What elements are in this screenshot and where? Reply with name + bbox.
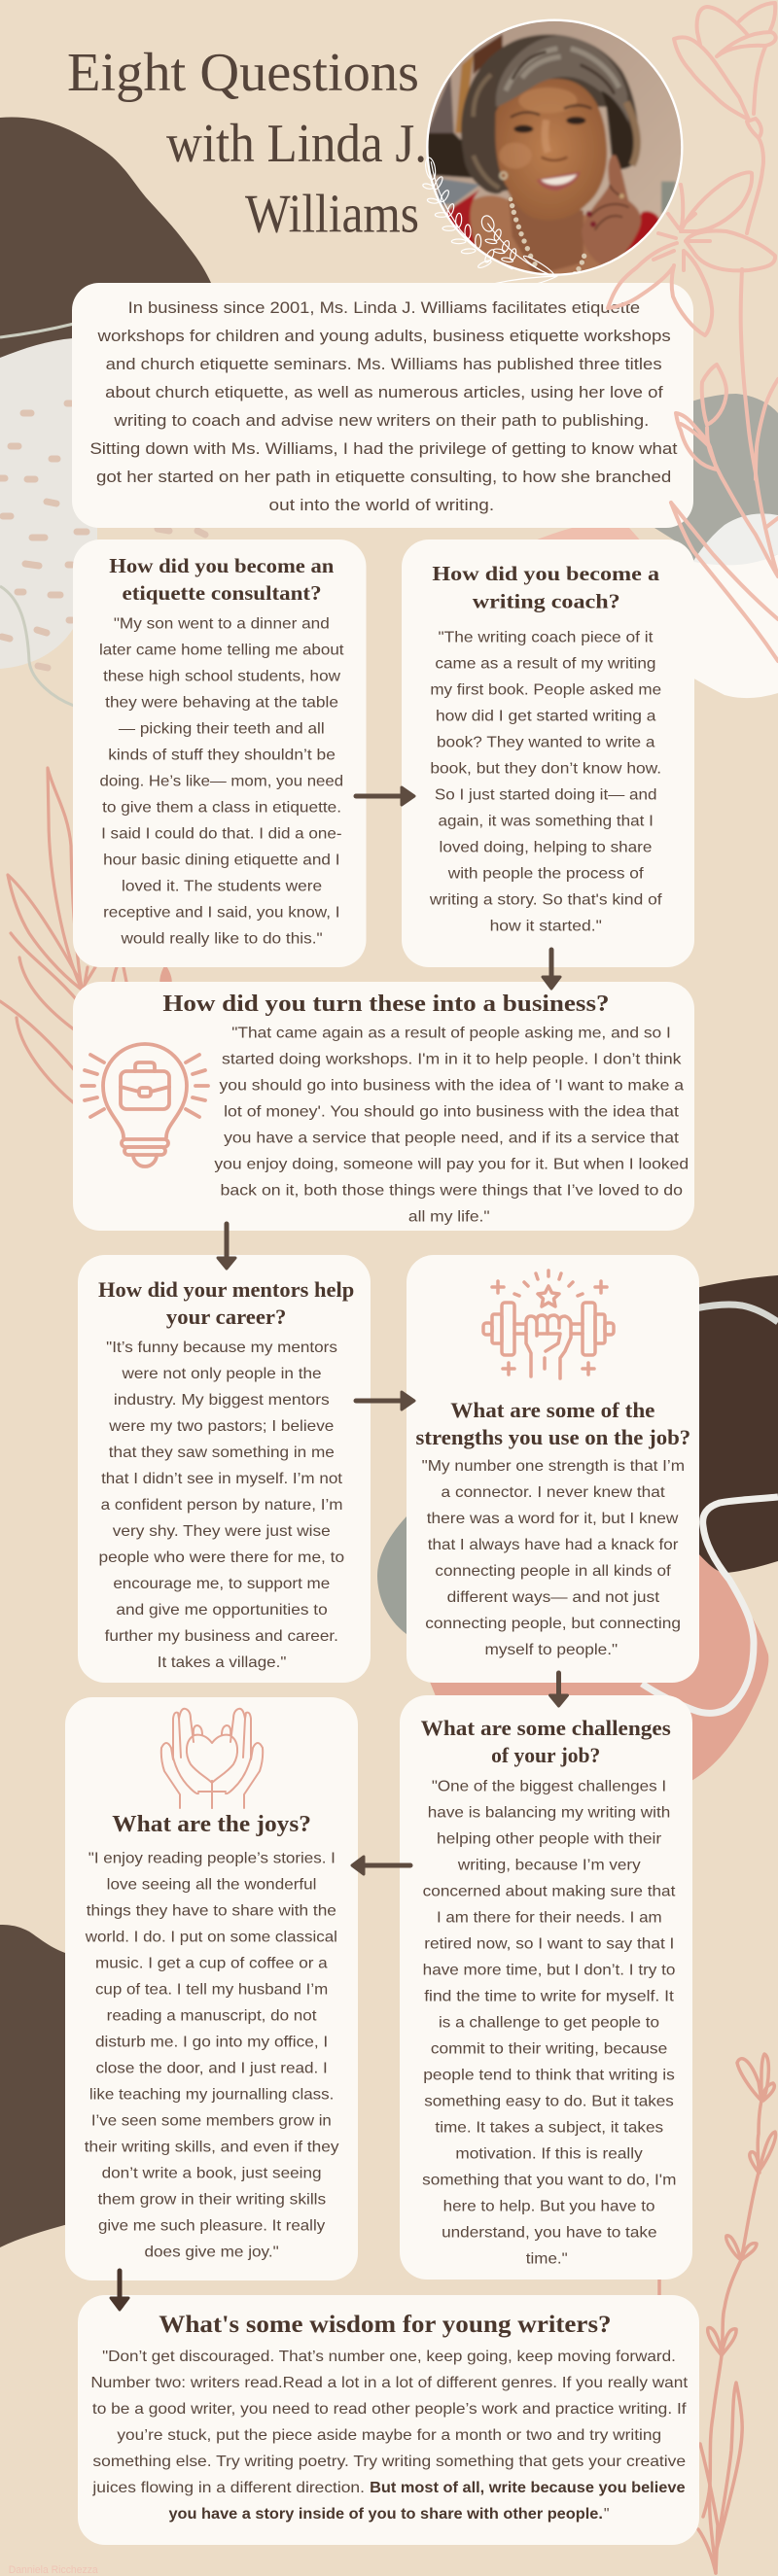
- text: mentors answer: people who were there for me, to: [99, 1549, 344, 1566]
- text: business answer: "That came again as a result of people asking me, and so I: [231, 1025, 671, 1041]
- text: strengths answer: connecting people, but connecting: [425, 1615, 681, 1632]
- portrait photo illustration: [425, 17, 688, 282]
- text: joys answer: "I enjoy reading people’s stories. I: [88, 1850, 336, 1866]
- text: writing coach answer: writing a story. So that's kind of: [428, 891, 662, 908]
- text: business answer: you should go into business with the idea of 'I want to make a: [220, 1077, 684, 1094]
- text: introduction paragraph: and church etiquette seminars. Ms. Williams has published three titles: [106, 355, 662, 373]
- panel: What are the joys?: [65, 1697, 358, 2280]
- text: challenges answer: something easy to do. But it takes: [424, 2093, 674, 2109]
- text: strengths answer: connecting people in all kinds of: [435, 1562, 672, 1580]
- text: mentors answer: encourage me, to support me: [113, 1575, 330, 1592]
- text: consultant answer: these high school students, how: [103, 667, 340, 684]
- text: challenges answer: "One of the biggest challenges I: [432, 1778, 666, 1794]
- text: challenges answer: have is balancing my writing with: [428, 1804, 670, 1821]
- text: challenges answer: helping other people with their: [437, 1830, 661, 1847]
- panel: introduction: [72, 283, 693, 528]
- text: writing coach answer: with people the process of: [446, 865, 645, 882]
- text: consultant answer: I said I could do that. I did a one-: [101, 824, 342, 842]
- text: consultant answer: receptive and I said, you know, I: [103, 903, 339, 921]
- text: challenges answer: here to help. But you have to: [443, 2198, 655, 2214]
- text: challenges answer: people tend to think that writing is: [423, 2067, 675, 2083]
- credit: author name: Danniela Ricchezza: [9, 2564, 99, 2576]
- text: wisdom answer: you’re stuck, put the piece aside maybe for a month or two and try writing: [117, 2426, 661, 2444]
- text: wisdom answer: "Don’t get discouraged. That’s number one, keep going, keep moving forward.: [102, 2348, 676, 2365]
- heading: etiquette consultant: etiquette consultant?: [123, 581, 322, 605]
- panel: What's some wisdom for young writers?: [78, 2295, 699, 2545]
- text: writing coach answer: [428, 629, 662, 934]
- text: writing coach answer: again, it was something that I: [439, 813, 654, 829]
- text: business answer: all my life.": [408, 1208, 490, 1225]
- text: challenges answer: retired now, so I want to say that I: [424, 1935, 674, 1952]
- text: writing coach answer: book, but they don’t know how.: [430, 760, 661, 777]
- text: challenges answer: something that you want to do, I'm: [422, 2172, 676, 2188]
- text: joys answer: give me such pleasure. It really: [98, 2217, 326, 2234]
- text: consultant answer: hour basic dining etiquette and I: [103, 851, 339, 868]
- text: challenges answer: [422, 1778, 676, 2267]
- arrow: consultant to coach: [356, 787, 414, 805]
- panel: What are some of the strengths you use on the job?: [407, 1255, 699, 1683]
- text: mentors answer: were not only people in the: [121, 1365, 322, 1382]
- text: wisdom answer: to be a good writer, you need to read other people’s work and practice writing. If: [92, 2400, 687, 2418]
- text: business answer: back on it, both those things were things that I’ve loved to do: [221, 1182, 683, 1199]
- text: mentors answer: and give me opportunities to: [116, 1601, 328, 1619]
- heading: mentors: your career?: [166, 1305, 286, 1329]
- text: challenges answer: writing, because I’m very: [457, 1857, 642, 1873]
- arrow: joys to wisdom: [111, 2271, 128, 2310]
- text: strengths answer: there was a word for it, but I knew: [427, 1510, 679, 1527]
- text: wisdom answer: Number two: writers read.Read a lot in a lot of different genres. If you really want: [90, 2374, 689, 2391]
- text: strengths answer: different ways— and not just: [447, 1588, 660, 1606]
- text: challenges answer: concerned about making sure that: [423, 1883, 676, 1899]
- heading: mentors: How did your mentors help: [98, 1277, 354, 1302]
- text: mentors answer: that they saw something in me: [109, 1444, 335, 1461]
- text: mentors answer: were my two pastors; I believe: [108, 1417, 335, 1435]
- heading: challenges: What are some challenges: [421, 1716, 671, 1740]
- text: mentors answer: industry. My biggest mentors: [114, 1391, 330, 1409]
- heading: writing coach: writing coach?: [473, 590, 620, 613]
- text: consultant answer: "My son went to a dinner and: [114, 614, 330, 632]
- heading: strengths: [416, 1398, 690, 1449]
- background shapes: middle right: [377, 1275, 778, 1781]
- title: Eight Questions: [67, 43, 419, 103]
- heading: joys: What are the joys?: [112, 1812, 311, 1837]
- text: writing coach answer: So I just started doing it— and: [435, 786, 657, 803]
- background shapes: top left: [0, 118, 211, 706]
- heading: writing coach: [432, 562, 660, 613]
- text: business answer: you have a service that people need, and if its a service that: [224, 1130, 680, 1146]
- heading: strengths: strengths you use on the job?: [416, 1425, 690, 1449]
- text: joys answer: disturb me. I go into my office, I: [95, 2034, 328, 2050]
- text: joys answer: their writing skills, and even if they: [85, 2139, 340, 2155]
- text: mentors answer: very shy. They were just wise: [113, 1522, 331, 1540]
- text: wisdom answer: [90, 2348, 689, 2523]
- text: joys answer: world. I do. I put on some classical: [84, 1929, 337, 1945]
- text: challenges answer: I am there for their needs. I am: [437, 1909, 662, 1926]
- text: joys answer: [84, 1850, 340, 2260]
- panel: How did your mentors help your career?: [78, 1255, 371, 1683]
- text: consultant answer: they were behaving at the table: [105, 693, 338, 711]
- text: mentors answer: [99, 1339, 344, 1671]
- heading: etiquette consultant: [109, 554, 335, 605]
- text: joys answer: things they have to share with the: [87, 1902, 336, 1919]
- text: joys answer: does give me joy.": [144, 2244, 279, 2260]
- arrow: coach to business: [543, 950, 560, 989]
- text: writing coach answer: book? They wanted to write a: [437, 734, 655, 750]
- heading: challenges: of your job?: [491, 1743, 600, 1767]
- text: introduction paragraph: about church etiquette, as well as numerous articles, using her love of: [105, 383, 663, 401]
- text: wisdom answer: you have a story inside of you to share with other people.: [168, 2505, 603, 2523]
- text: writing coach answer: how did I get started writing a: [436, 708, 656, 724]
- title: [67, 43, 427, 245]
- text: consultant answer: kinds of stuff they shouldn’t be: [108, 746, 336, 763]
- text: challenges answer: understand, you have to take: [442, 2224, 657, 2241]
- text: mentors answer: that I didn’t see in myself. I’m not: [101, 1470, 343, 1487]
- text: joys answer: love seeing all the wonderful: [107, 1876, 317, 1893]
- text: joys answer: don’t write a book, just seeing: [102, 2165, 322, 2181]
- arrow: challenges to joys: [352, 1857, 410, 1874]
- panel: How did you become an etiquette consultant?: [73, 540, 366, 967]
- heading: writing coach: How did you become a: [432, 562, 660, 585]
- text: introduction paragraph: In business since 2001, Ms. Linda J. Williams facilitates etiquette: [128, 298, 640, 317]
- text: consultant answer: loved it. The students were: [122, 877, 322, 894]
- text: introduction paragraph: [89, 298, 678, 514]
- background shape: lower left: [0, 1925, 68, 2247]
- text: joys answer: reading a manuscript, do not: [107, 2007, 317, 2024]
- text: strengths answer: that I always have had a knack for: [428, 1536, 678, 1553]
- text: writing coach answer: my first book. People asked me: [430, 681, 661, 698]
- text: challenges answer: is a challenge to get people to: [439, 2014, 659, 2031]
- white sprig decoration: [422, 157, 557, 287]
- text: strengths answer: "My number one strength is that I’m: [422, 1457, 685, 1475]
- text: business answer: you enjoy doing, someone will pay you for it. But when I looked: [214, 1156, 689, 1172]
- text: joys answer: them grow in their writing skills: [98, 2191, 326, 2208]
- text: consultant answer: would really like to do this.": [120, 929, 323, 947]
- arrow: business to mentors: [218, 1224, 235, 1269]
- text: introduction paragraph: writing to coach and advise new writers on their path to publishing.: [113, 411, 649, 430]
- text: wisdom answer: But most of all, write because you believe: [370, 2479, 686, 2496]
- plant: top right flower: [608, 3, 778, 661]
- heading: wisdom: What's some wisdom for young writers?: [159, 2312, 612, 2338]
- text: joys answer: like teaching my journalling class.: [89, 2086, 334, 2103]
- text: business answer: started doing workshops. I'm in it to help people. I don’t think: [222, 1051, 683, 1067]
- text: business answer: lot of money'. You should go into business with the idea that: [224, 1103, 680, 1120]
- text: introduction paragraph: got her started on her path in etiquette consulting, to how she branched: [96, 468, 671, 486]
- text: challenges answer: time. It takes a subject, it takes: [435, 2119, 663, 2136]
- text: mentors answer: It takes a village.": [158, 1654, 286, 1671]
- heading: etiquette consultant: How did you become an: [109, 554, 335, 577]
- text: mentors answer: "It’s funny because my mentors: [106, 1339, 337, 1356]
- text: strengths answer: a connector. I never knew that: [442, 1483, 665, 1501]
- text: challenges answer: commit to their writing, because: [431, 2040, 667, 2057]
- text: consultant answer: doing. He’s like— mom, you need: [100, 772, 343, 789]
- icon: fist and dumbbell: [483, 1271, 614, 1378]
- panel: How did you become a writing coach?: [402, 540, 694, 967]
- text: writing coach answer: how it started.": [490, 918, 602, 934]
- text: challenges answer: find the time to write for myself. It: [424, 1988, 675, 2004]
- plant: bottom right: [659, 2054, 776, 2573]
- text: challenges answer: motivation. If this is really: [455, 2145, 644, 2162]
- background shapes: top right: [525, 394, 778, 698]
- text: business answer: [214, 1025, 689, 1225]
- text: introduction paragraph: out into the world of writing.: [269, 496, 494, 514]
- heading: business: How did you turn these into a business?: [162, 992, 610, 1017]
- arrow: strengths to challenges: [550, 1673, 568, 1706]
- text: strengths answer: [422, 1457, 685, 1658]
- text: wisdom answer: juices flowing in a different direction.: [91, 2479, 365, 2496]
- icon: light bulb with briefcase: [82, 1044, 208, 1166]
- heading: mentors: [98, 1277, 354, 1329]
- text: consultant answer: [99, 614, 344, 947]
- text: mentors answer: a confident person by nature, I’m: [101, 1496, 343, 1514]
- icon: hands holding heart: [161, 1709, 263, 1808]
- heading: challenges: [421, 1716, 671, 1767]
- text: joys answer: I’ve seen some members grow in: [91, 2112, 332, 2129]
- text: wisdom answer: ": [604, 2505, 610, 2523]
- text: joys answer: music. I get a cup of coffee or a: [95, 1955, 328, 1971]
- plant: left: [0, 768, 170, 1106]
- text: consultant answer: — picking their teeth and all: [119, 719, 325, 737]
- text: introduction paragraph: Sitting down with Ms. Williams, I had the privilege of getting to know what: [89, 439, 678, 458]
- text: writing coach answer: came as a result of my writing: [435, 655, 656, 672]
- text: consultant answer: later came home telling me about: [99, 641, 344, 658]
- text: consultant answer: to give them a class in etiquette.: [102, 798, 341, 816]
- text: wisdom answer: something else. Try writing poetry. Try writing something that gets your creative: [92, 2453, 686, 2470]
- text: challenges answer: have more time, but I don’t. I try to: [423, 1962, 676, 1978]
- text: writing coach answer: "The writing coach piece of it: [439, 629, 654, 645]
- text: challenges answer: time.": [526, 2250, 568, 2267]
- panel: How did you turn these into a business?: [73, 982, 694, 1231]
- text: writing coach answer: loved doing, helping to share: [440, 839, 653, 855]
- text: joys answer: cup of tea. I tell my husband I’m: [95, 1981, 328, 1998]
- title: with Linda J.: [166, 114, 427, 174]
- text: strengths answer: myself to people.": [484, 1641, 618, 1658]
- text: mentors answer: further my business and career.: [105, 1627, 338, 1645]
- arrow: mentors to strengths: [356, 1392, 414, 1410]
- panel: What are some challenges of your job?: [400, 1695, 692, 2280]
- text: introduction paragraph: workshops for children and young adults, business etiquette workshops: [96, 327, 671, 345]
- text: joys answer: close the door, and I just read. I: [95, 2060, 328, 2076]
- heading: strengths: What are some of the: [450, 1398, 655, 1422]
- title: Williams: [245, 185, 419, 245]
